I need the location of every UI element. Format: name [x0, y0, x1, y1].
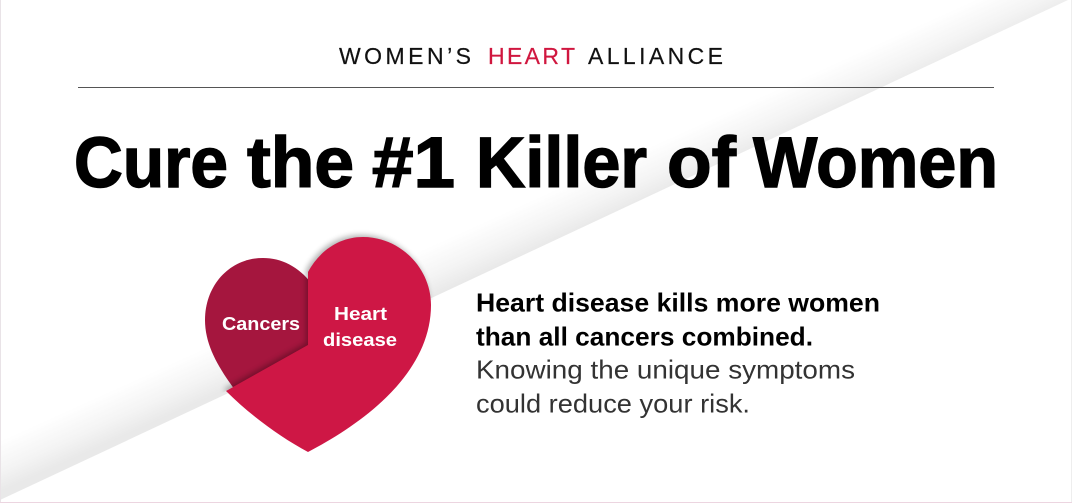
logo heading: HEART	[488, 43, 575, 69]
heart segment: cancers: Cancers	[222, 313, 300, 334]
heart segment: heart disease	[226, 237, 431, 452]
logo heading: ALLIANCE	[588, 43, 723, 69]
title: Cure	[74, 124, 228, 203]
body text: Heart disease kills more women	[476, 288, 880, 318]
body text: could reduce your risk.	[476, 388, 750, 418]
title	[74, 124, 998, 203]
body text: Knowing the unique symptoms	[476, 354, 855, 384]
title: Women	[753, 124, 998, 203]
title: Killer	[476, 124, 647, 203]
title: #1	[372, 124, 455, 203]
heart segment shadow	[223, 232, 432, 392]
body text	[476, 288, 880, 418]
logo heading: WOMEN’S	[339, 43, 471, 69]
heart segment: cancers	[205, 258, 312, 390]
body text: than all cancers combined.	[476, 322, 813, 352]
heart segment: heart disease: Heart	[334, 303, 387, 324]
title: the	[247, 124, 354, 203]
logo heading	[339, 43, 723, 69]
title: of	[667, 124, 736, 203]
heart chart	[205, 235, 431, 452]
heart segment: heart disease: disease	[323, 329, 397, 350]
